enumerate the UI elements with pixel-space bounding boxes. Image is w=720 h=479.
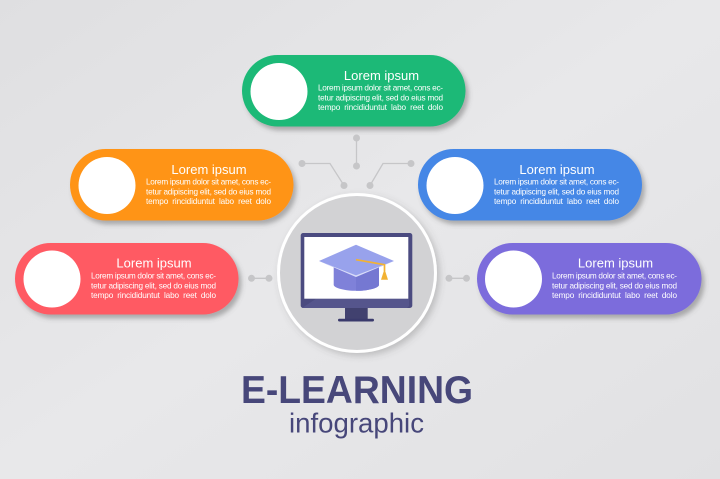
panel: blue: tetur adipiscing elit, sed do eius mod bbox=[494, 187, 619, 196]
panel: orange bbox=[70, 149, 294, 220]
panel: purple: Lorem ipsum bbox=[578, 256, 653, 270]
connectors bbox=[248, 134, 470, 282]
subtitle: infographic bbox=[289, 408, 424, 438]
icon: graduation cap bbox=[319, 245, 394, 291]
panel: green bbox=[242, 55, 466, 126]
panel: orange: tempo rincididuntut labo reet dolo bbox=[146, 197, 271, 206]
panel: orange: Lorem ipsum bbox=[171, 162, 247, 177]
panel: green: Lorem ipsum bbox=[344, 68, 419, 83]
panel: green: tetur adipiscing elit, sed do eius mod bbox=[318, 93, 443, 102]
panel: red: Lorem ipsum bbox=[116, 256, 192, 270]
panel: purple: tempo rincididuntut labo reet dolo bbox=[552, 291, 677, 300]
panel: red: tetur adipiscing elit, sed do eius mod bbox=[91, 281, 216, 290]
title: E-LEARNING bbox=[241, 369, 473, 412]
panel: red: Lorem ipsum dolor sit amet, cons ec- bbox=[91, 272, 216, 280]
panel: green: Lorem ipsum dolor sit amet, cons ec- bbox=[318, 84, 443, 92]
panel: orange: Lorem ipsum dolor sit amet, cons ec- bbox=[146, 178, 271, 186]
panel: purple bbox=[477, 243, 702, 314]
panel: blue bbox=[418, 149, 642, 220]
center circle bbox=[278, 194, 436, 352]
panel: blue: tempo rincididuntut labo reet dolo bbox=[494, 197, 619, 206]
panel: orange: tetur adipiscing elit, sed do eius mod bbox=[146, 187, 271, 196]
panel: red bbox=[15, 243, 238, 314]
panel: red: tempo rincididuntut labo reet dolo bbox=[91, 291, 216, 300]
panel: purple: Lorem ipsum dolor sit amet, cons ec- bbox=[552, 272, 677, 280]
panel: blue: Lorem ipsum bbox=[519, 162, 595, 177]
panel: purple: tetur adipiscing elit, sed do eius mod bbox=[552, 281, 677, 290]
panel: green: tempo rincididuntut labo reet dolo bbox=[318, 103, 443, 112]
panel: blue: Lorem ipsum dolor sit amet, cons ec- bbox=[494, 178, 619, 186]
icon: monitor with graduation cap bbox=[301, 233, 412, 322]
